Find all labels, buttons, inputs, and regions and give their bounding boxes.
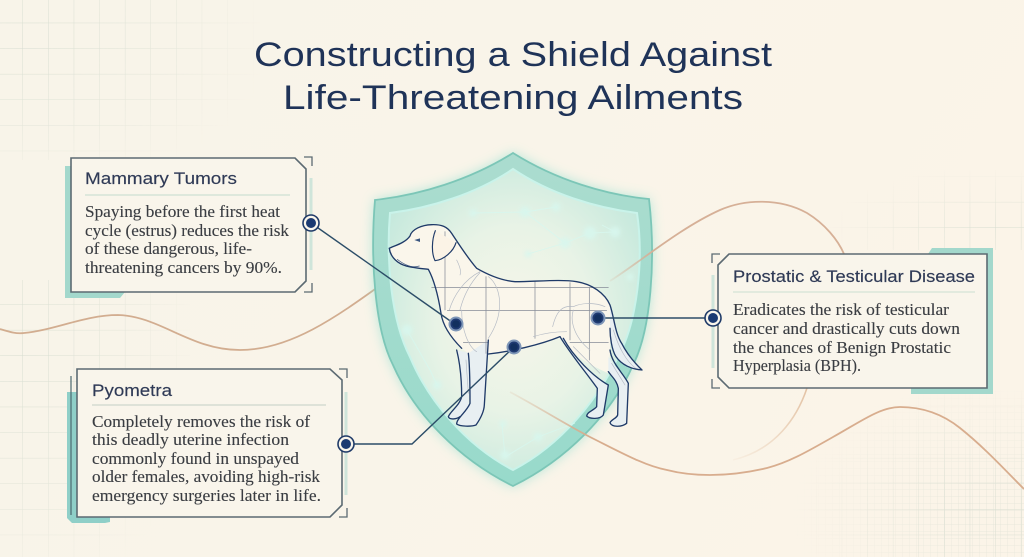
title: [254, 36, 773, 117]
shield inner panel: [389, 169, 640, 470]
body text: Hyperplasia (BPH).: [733, 356, 861, 375]
card box: [71, 158, 306, 292]
dog eye: [414, 238, 420, 242]
node: [705, 310, 721, 326]
card shadow: [65, 166, 125, 298]
body text: [92, 412, 321, 505]
panel: mammary tumors: [65, 157, 319, 298]
body text: older females, avoiding high-risk: [92, 467, 321, 486]
dog outline: [389, 225, 642, 426]
dog illustration: [389, 225, 642, 426]
accent bar and brackets: [712, 275, 714, 368]
dog muscle contours: [449, 260, 638, 393]
body text: cancer and drastically cuts down: [733, 319, 960, 338]
dog marker: belly: [508, 340, 520, 354]
body text: Spaying before the first heat: [85, 202, 280, 221]
connector: pyometra: [346, 347, 514, 444]
body text: cycle (estrus) reduces the risk: [85, 221, 290, 240]
dog anatomy grid: [432, 232, 608, 360]
dog ear: [432, 231, 456, 261]
dog mouth: [397, 259, 419, 267]
body text: [85, 202, 290, 277]
body text: of these dangerous, life-: [85, 239, 252, 258]
heading: Pyometra: [92, 382, 173, 400]
title: Life-Threatening Ailments: [283, 79, 743, 117]
body text: emergency surgeries later in life.: [92, 486, 321, 505]
connector: mammary tumors: [311, 223, 456, 325]
body text: this deadly uterine infection: [92, 430, 289, 449]
body text: threatening cancers by 90%.: [85, 258, 282, 277]
card shadow: [911, 248, 993, 394]
body text: Completely removes the risk of: [92, 412, 311, 431]
card box: [718, 254, 987, 388]
shield network pattern: [402, 203, 633, 460]
heading: Prostatic & Testicular Disease: [733, 268, 975, 286]
node: [303, 215, 319, 231]
curve: short tan arc below right card: [733, 388, 807, 460]
connector: prostatic disease: [598, 317, 713, 319]
shield glow: [373, 153, 652, 486]
panel: pyometra: [67, 369, 354, 523]
body text: the chances of Benign Prostatic: [733, 338, 951, 357]
curve: upper right tan wave: [610, 202, 844, 281]
accent bar and brackets: [310, 178, 312, 270]
body text: Eradicates the risk of testicular: [733, 300, 950, 319]
node: [338, 436, 354, 452]
dog body fill: [389, 225, 611, 373]
shield rim: [373, 153, 652, 486]
dog marker: chest: [450, 318, 462, 330]
panel: prostatic and testicular disease: [705, 248, 993, 394]
heading: Mammary Tumors: [85, 170, 237, 188]
dog tail and leg fills: [448, 305, 642, 426]
card box: [77, 369, 342, 517]
accent bar and brackets: [344, 392, 348, 495]
curve: left tan wave: [0, 282, 385, 350]
body text: [733, 300, 960, 375]
body text: commonly found in unspayed: [92, 449, 300, 468]
card shadow: [67, 392, 110, 523]
curve: long tan wave crossing lower shield: [510, 392, 1024, 489]
title: Constructing a Shield Against: [254, 36, 773, 74]
dog marker: hind: [592, 312, 604, 324]
shield: [373, 153, 652, 486]
